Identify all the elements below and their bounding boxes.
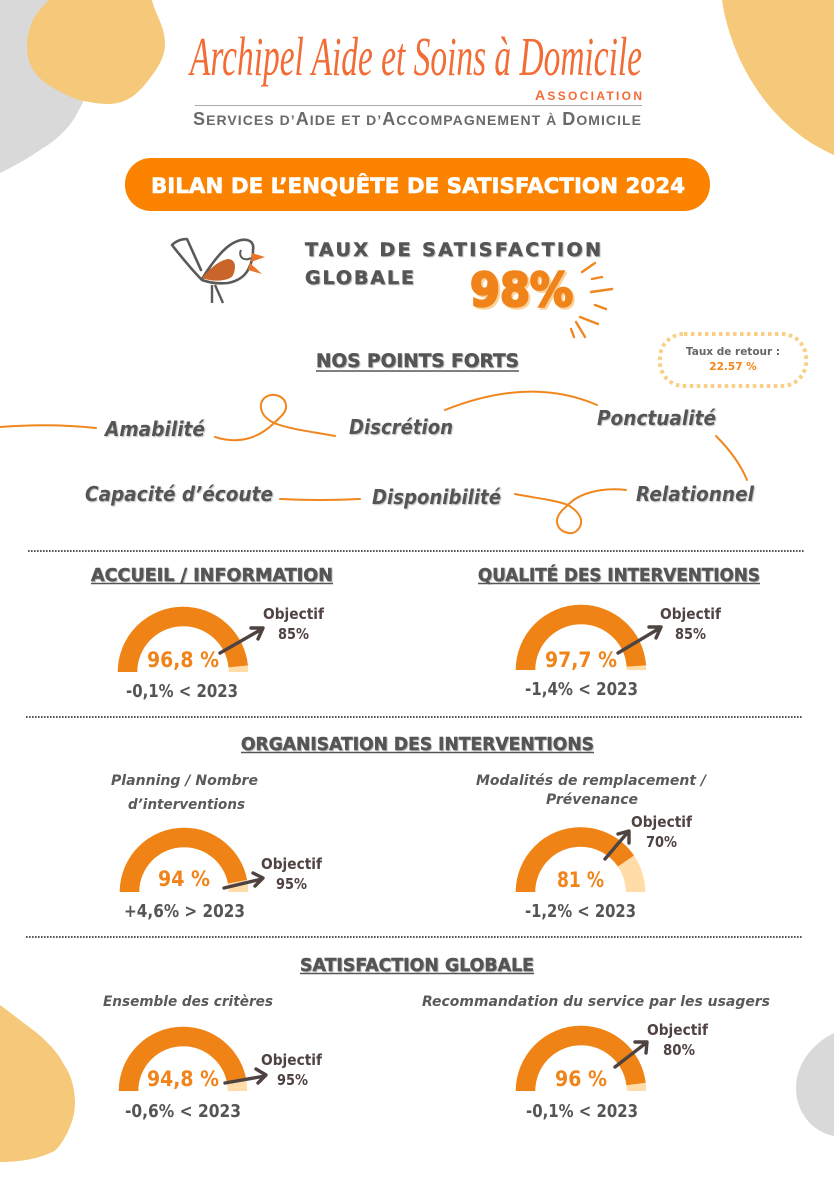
subtitle: recommandation: Recommandation du service par les usagers [422, 994, 770, 1010]
icon: bird [172, 239, 265, 303]
gauge: planning: Objectif [261, 855, 322, 873]
label: ponctualité: Ponctualité [597, 406, 716, 430]
gauge: recommandation [526, 1021, 708, 1122]
label: disponibilité: Disponibilité [372, 485, 501, 509]
gauge: qualité: -1,4% < 2023 [525, 679, 638, 700]
gauge: accueil: 85% [278, 625, 309, 643]
gauge: ensemble: 94,8 % [147, 1067, 219, 1091]
subtitle: planning: d’interventions [128, 797, 245, 813]
gauge: planning: 94 % [158, 867, 210, 891]
gauge: accueil: 96,8 % [147, 648, 219, 672]
title banner: BILAN DE L’ENQUÊTE DE SATISFACTION 2024 [151, 173, 685, 199]
logo name: Archipel Aide et Soins à Domicile [188, 26, 642, 87]
gauge: modalités: -1,2% < 2023 [525, 901, 636, 922]
heading: nos points forts: NOS POINTS FORTS [316, 350, 519, 372]
callout: taux de retour: 22.57 % [709, 361, 757, 373]
title banner [125, 158, 710, 211]
gauge: accueil [126, 605, 324, 702]
gauge: modalités [525, 813, 692, 922]
gauge: qualité: Objectif [660, 605, 721, 623]
gauge: planning: +4,6% > 2023 [124, 901, 245, 922]
heading: accueil / information: ACCUEIL / INFORMATION [91, 565, 333, 586]
gauge: modalités: 70% [646, 833, 677, 851]
gauge: recommandation: Objectif [647, 1021, 708, 1039]
label: capacité d'écoute: Capacité d’écoute [85, 482, 273, 506]
gauge: accueil: Objectif [263, 605, 324, 623]
blob: top-right orange [722, 0, 834, 155]
gauge: accueil: -0,1% < 2023 [126, 681, 238, 702]
gauge: ensemble: 95% [277, 1071, 308, 1089]
logo services: SERVICES D’AIDE ET D’ACCOMPAGNEMENT À DOMICILE [193, 109, 641, 129]
heading: qualité des interventions: QUALITÉ DES INTERVENTIONS [478, 564, 760, 586]
subtitle: modalités: Modalités de remplacement / [476, 773, 708, 789]
heading: taux de satisfaction globale: GLOBALE [305, 267, 414, 289]
heading: organisation des interventions: ORGANISATION DES INTERVENTIONS [241, 734, 594, 755]
heading: taux de satisfaction globale: TAUX DE SATISFACTION [305, 239, 601, 261]
heading: taux de satisfaction globale [305, 239, 601, 289]
gauge: qualité: 85% [675, 625, 706, 643]
label: relationnel: Relationnel [636, 482, 755, 506]
points forts labels [85, 406, 755, 509]
blob: bottom-right grey [796, 1033, 834, 1136]
gauge: planning: 95% [276, 875, 307, 893]
callout: taux de retour: Taux de retour : [686, 346, 780, 358]
blob: top-left orange [27, 0, 165, 104]
subtitle: planning: Planning / Nombre [111, 773, 258, 789]
gauge: qualité [525, 605, 721, 700]
gauge: ensemble: -0,6% < 2023 [125, 1101, 241, 1122]
points forts connector lines [0, 392, 747, 533]
subtitle: ensemble des critères: Ensemble des critères [103, 994, 273, 1010]
blob: top-left grey [0, 0, 83, 173]
gauge: recommandation: 96 % [555, 1067, 607, 1091]
label: amabilité: Amabilité [103, 417, 205, 441]
gauge: modalités: Objectif [631, 813, 692, 831]
logo [188, 26, 642, 129]
callout: taux de retour [660, 334, 806, 386]
subtitle: planning [111, 773, 258, 813]
figure: 98%: 98% [470, 263, 573, 317]
gauge: planning [124, 838, 322, 922]
heading: satisfaction globale: SATISFACTION GLOBALE [300, 955, 534, 976]
subtitle: modalités [476, 773, 708, 808]
label: discrétion: Discrétion [349, 415, 453, 439]
gauge: qualité: 97,7 % [545, 648, 617, 672]
blob: bottom-left orange [0, 1005, 75, 1162]
gauge: ensemble: Objectif [261, 1051, 322, 1069]
logo association: ASSOCIATION [535, 87, 642, 103]
gauge: ensemble [125, 1036, 322, 1122]
gauge: recommandation: 80% [663, 1041, 695, 1059]
icon: sun rays [571, 263, 612, 337]
gauge: recommandation: -0,1% < 2023 [526, 1101, 638, 1122]
gauge: modalités: 81 % [557, 868, 604, 892]
subtitle: modalités: Prévenance [546, 792, 638, 808]
